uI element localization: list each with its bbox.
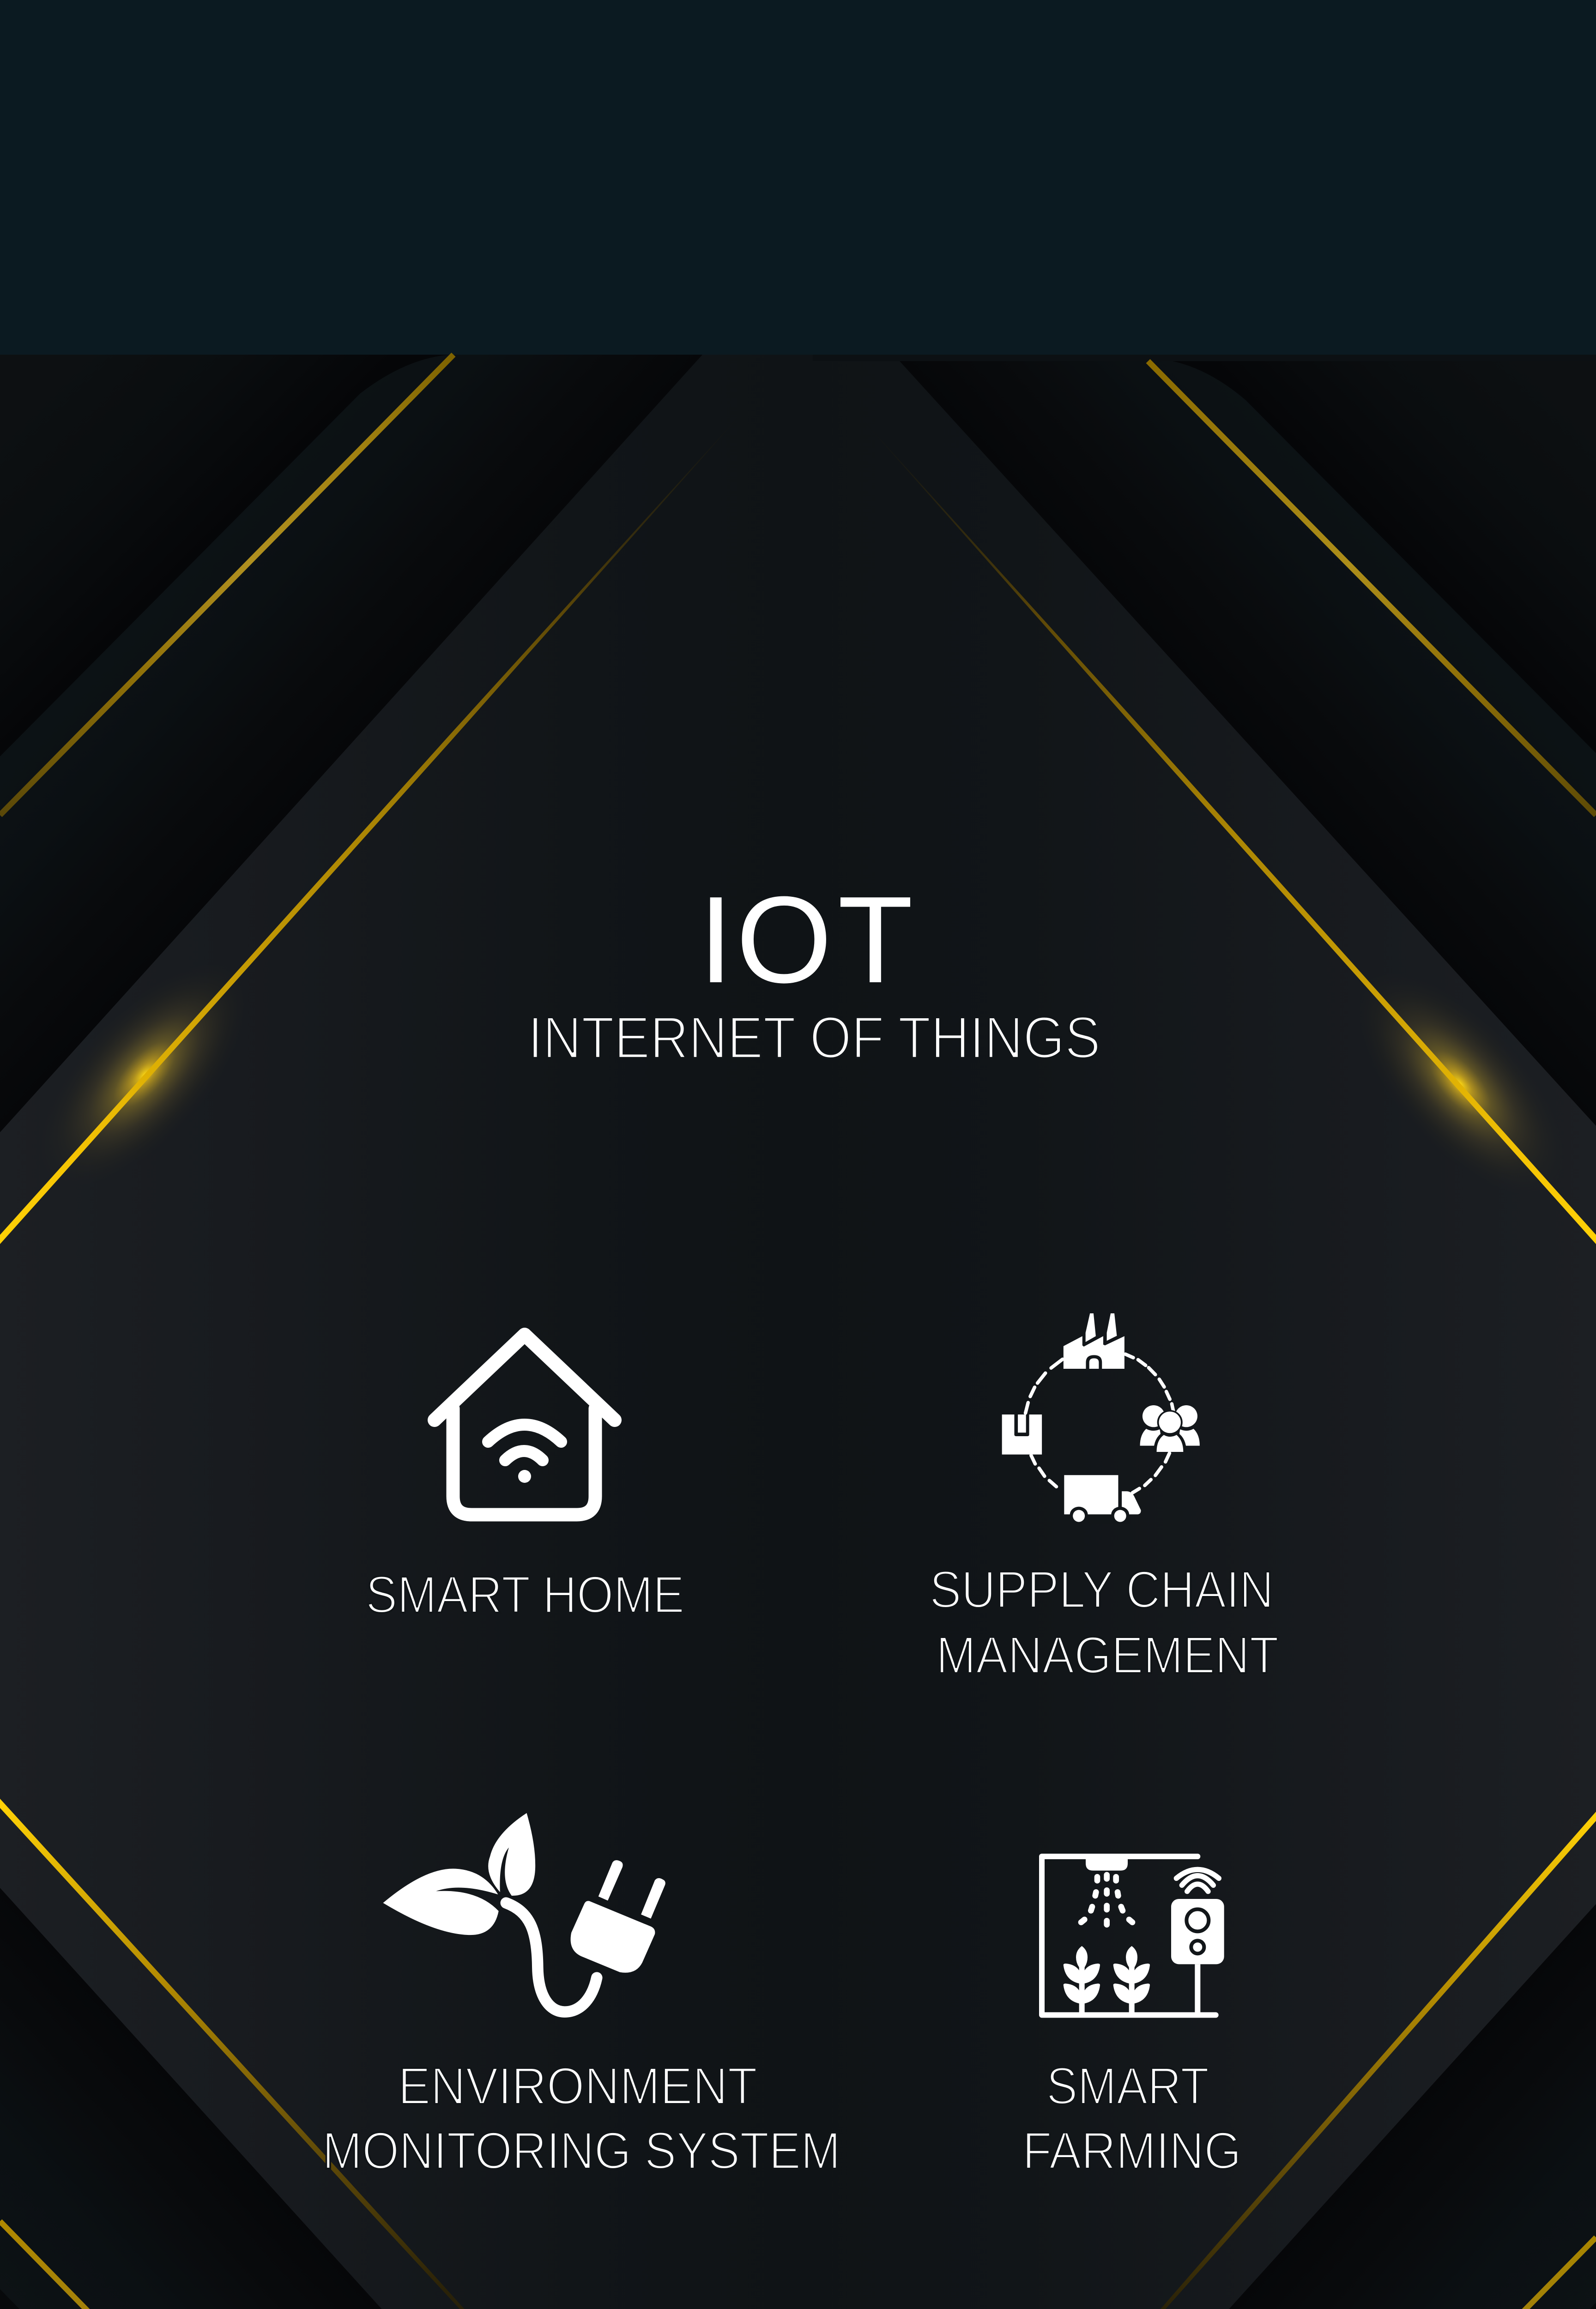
icon: environment plant plug (383, 1813, 665, 2012)
package (1002, 1414, 1042, 1455)
icon: smart farming (1042, 1856, 1224, 2015)
glow: right (1321, 939, 1596, 1228)
factory (1064, 1336, 1124, 1369)
label: smart farming: FARMING (1022, 2122, 1241, 2180)
title: IOT (699, 870, 913, 1009)
truck (1064, 1475, 1141, 1524)
label: environment monitoring system (322, 2057, 840, 2180)
label: smart farming (1022, 2057, 1241, 2180)
icon: supply chain (1002, 1313, 1200, 1524)
people (1140, 1405, 1200, 1452)
label: smart home: SMART HOME (366, 1566, 684, 1624)
label: supply chain management: MANAGEMENT (936, 1626, 1279, 1684)
label: supply chain management: SUPPLY CHAIN (930, 1560, 1274, 1619)
dashed supply ring (1026, 1354, 1173, 1493)
factory chimneys (1086, 1313, 1117, 1342)
icon: smart home (435, 1335, 615, 1515)
label: environment monitoring system: ENVIRONMENT (398, 2057, 757, 2115)
label: smart farming: SMART (1046, 2057, 1209, 2115)
label: supply chain management (930, 1560, 1279, 1684)
glow: left (6, 930, 284, 1219)
label: environment monitoring system: MONITORING SYSTEM (322, 2122, 840, 2180)
subtitle: INTERNET OF THINGS (528, 1005, 1100, 1071)
